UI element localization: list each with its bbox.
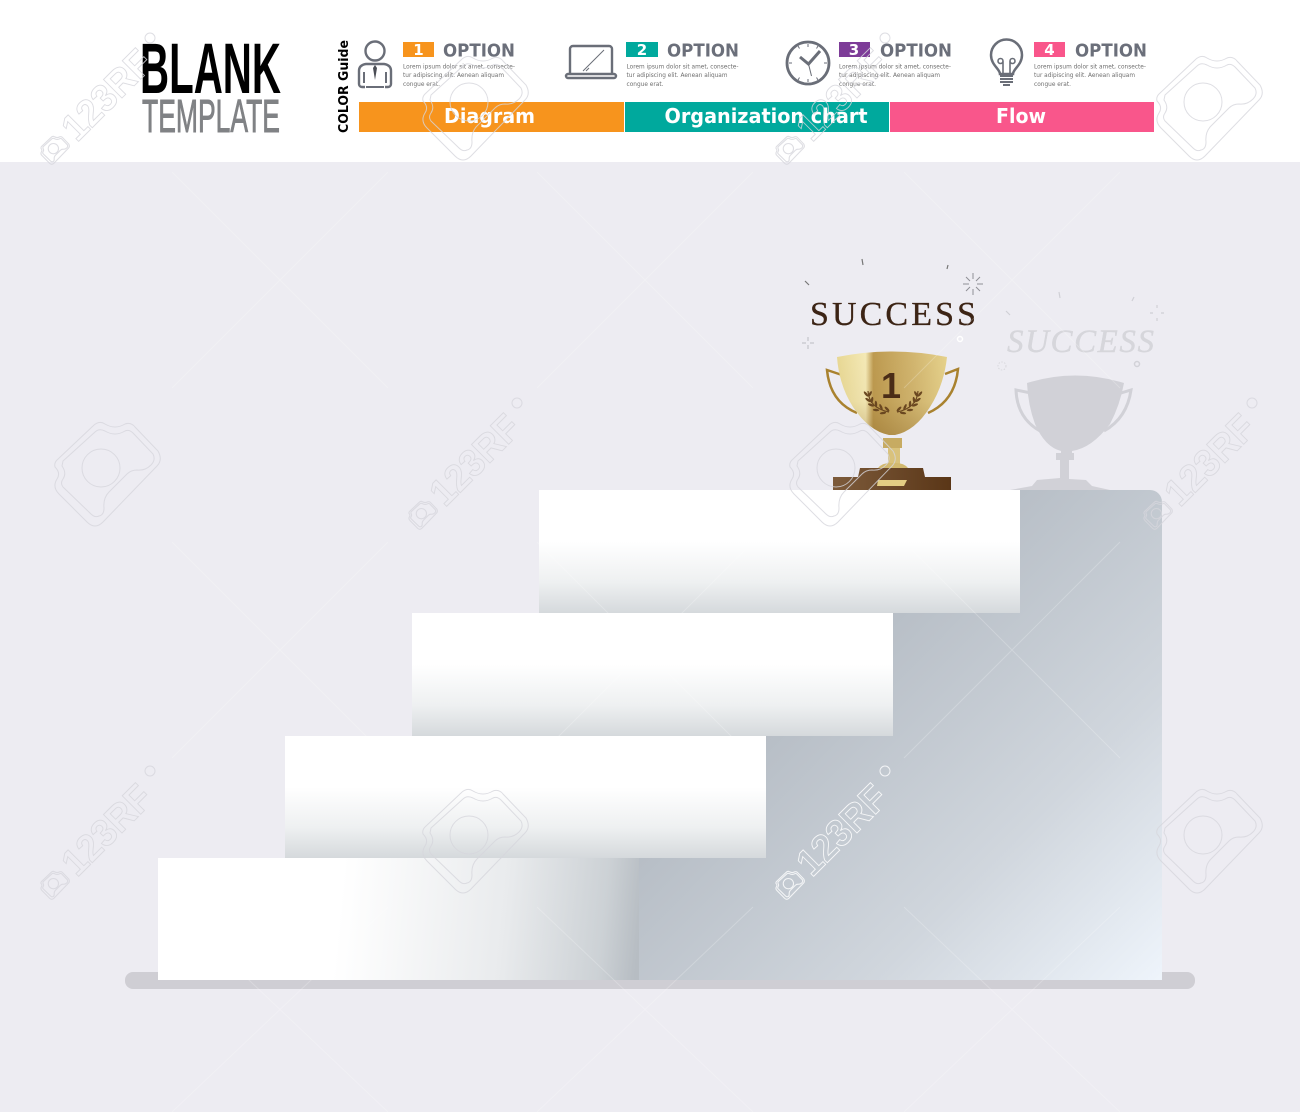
right laurel: [896, 391, 923, 415]
option 4: congue erat.: [1034, 81, 1071, 88]
title: TEMPLATE: [142, 90, 280, 142]
icon: laptop: [566, 46, 616, 78]
title: [140, 30, 281, 142]
stair step 1: [539, 490, 1020, 613]
ghost trophy shadow: SUCCESS: [1007, 324, 1154, 360]
left laurel: [863, 391, 890, 415]
option 3: 3: [849, 41, 859, 59]
handles: [827, 369, 958, 413]
success heading: SUCCESS: [810, 296, 976, 333]
title: BLANK: [140, 30, 281, 109]
watermark text: 123RF: [54, 777, 161, 884]
header band: [0, 0, 1300, 162]
number one: 1: [881, 365, 901, 406]
category bar: organization chart: [625, 102, 889, 132]
option 4: Lorem ipsum dolor sit amet, consecte-: [1034, 64, 1146, 70]
watermark text: [54, 42, 1264, 884]
watermark text: 123RF: [789, 42, 896, 149]
option 1: Lorem ipsum dolor sit amet, consecte-: [403, 64, 515, 70]
option 4: tur adipiscing elit. Aenean aliquam: [1034, 72, 1135, 79]
category bar: diagram: [359, 102, 624, 132]
confetti sparkles: [802, 259, 983, 349]
option 1: OPTION: [443, 40, 515, 62]
icon: clock: [787, 42, 829, 84]
option 3: tur adipiscing elit. Aenean aliquam: [839, 72, 940, 79]
option 2: OPTION: [667, 40, 739, 62]
gold trophy: [802, 259, 983, 490]
option 2: tur adipiscing elit. Aenean aliquam: [626, 72, 728, 79]
stair shadow panel: [639, 490, 1162, 980]
watermark text: 123RF: [422, 407, 529, 514]
option 2: congue erat.: [626, 81, 664, 88]
icon: light bulb: [991, 40, 1022, 85]
option 2: Lorem ipsum dolor sit amet, consecte-: [626, 64, 738, 70]
icon: person: [359, 42, 391, 87]
option 3: congue erat.: [839, 81, 876, 88]
cup shading: [837, 352, 947, 435]
floor shelf: [125, 972, 1195, 989]
color guide label: COLOR Guide: [337, 40, 352, 133]
option 3: OPTION: [880, 40, 952, 62]
category bar: flow: [890, 102, 1154, 132]
option 1: [403, 40, 515, 88]
base: [833, 468, 951, 490]
stair step 2: [412, 613, 893, 736]
stair step 4: [158, 858, 639, 980]
watermark text: 123RF: [54, 42, 161, 149]
cup: [837, 352, 947, 435]
option 4: OPTION: [1075, 40, 1147, 62]
category bar: flow: Flow: [996, 104, 1046, 128]
option 4: [1034, 40, 1147, 88]
option 1: tur adipiscing elit. Aenean aliquam: [403, 72, 504, 79]
category bar: diagram: Diagram: [444, 104, 535, 128]
stem: [883, 438, 902, 448]
option 2: 2: [637, 41, 647, 59]
ghost trophy shadow: [998, 292, 1164, 490]
option 1: congue erat.: [403, 81, 440, 88]
watermark text: 123RF: [789, 777, 896, 884]
watermark text: 123RF: [1157, 407, 1264, 514]
option 3: [839, 40, 952, 88]
option 4: 4: [1044, 41, 1055, 59]
option 2: [626, 40, 739, 88]
option 3: Lorem ipsum dolor sit amet, consecte-: [839, 64, 951, 70]
category bar: organization chart: Organization chart: [664, 104, 868, 128]
option 1: 1: [413, 41, 424, 59]
watermark stamps: [41, 33, 1262, 899]
stair step 3: [285, 736, 766, 858]
